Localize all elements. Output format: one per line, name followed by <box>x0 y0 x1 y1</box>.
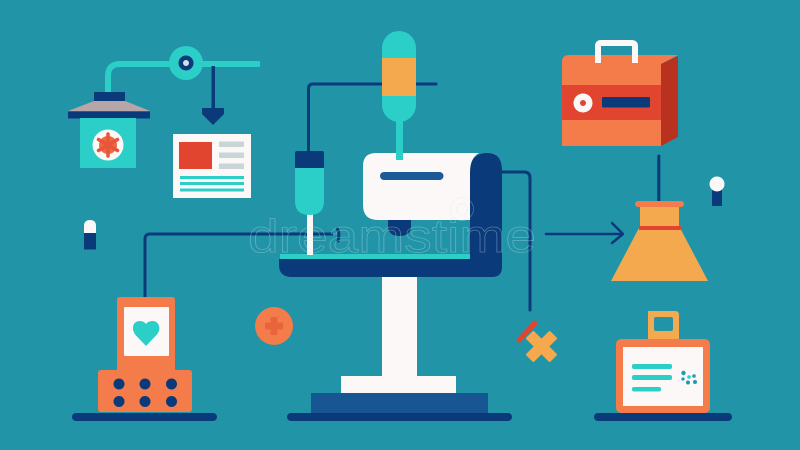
heart monitor <box>72 297 217 421</box>
badge text lines <box>632 364 672 392</box>
document card <box>173 134 251 198</box>
badge clip <box>648 311 679 340</box>
monitor buttons <box>114 378 177 407</box>
monitor screen <box>124 307 169 356</box>
toolbox latch <box>574 94 592 112</box>
watermark <box>248 198 536 262</box>
machine head <box>363 153 479 220</box>
central machine <box>279 153 512 421</box>
toolbox <box>562 43 678 146</box>
toolbox side <box>661 56 678 146</box>
machine frame <box>279 153 502 277</box>
badge card <box>623 347 703 406</box>
badge dots <box>681 371 697 384</box>
teal pipe <box>108 64 260 93</box>
monitor ground <box>72 413 217 421</box>
toolbox front <box>562 55 678 146</box>
flask <box>611 201 708 281</box>
arrow: towards flask <box>546 223 623 243</box>
toolbox band <box>562 85 661 120</box>
icon: wrench cross <box>517 322 566 371</box>
icon: heart <box>133 321 159 346</box>
machine bed <box>280 254 470 259</box>
badge frame <box>616 339 710 413</box>
connector: navy line from syringe to capsule <box>308 84 436 152</box>
icon: plus badge <box>255 307 293 345</box>
capsule dropper <box>382 31 416 160</box>
badge ground <box>594 413 732 421</box>
ID badge <box>594 311 732 421</box>
head label bar <box>380 172 444 180</box>
lamp <box>68 92 150 168</box>
toolbox handle <box>598 43 635 63</box>
valve dial <box>169 46 203 80</box>
connector: navy line from machine down to wrench <box>500 172 530 310</box>
watermark: dreamstime <box>248 210 536 262</box>
nozzle <box>388 220 411 236</box>
connector: navy line from monitor to central machine <box>145 234 333 297</box>
pill icon left <box>84 220 96 250</box>
arrow: down to document <box>202 66 224 125</box>
short tick mark beside line <box>338 229 339 241</box>
connector: toolbox to flask <box>657 156 660 201</box>
syringe <box>295 151 324 255</box>
pill icon right <box>710 176 724 206</box>
monitor body <box>98 297 192 412</box>
toolbox label <box>602 97 650 108</box>
machine stand <box>287 277 512 421</box>
icon group: lamp, valve and arrow <box>68 46 260 168</box>
